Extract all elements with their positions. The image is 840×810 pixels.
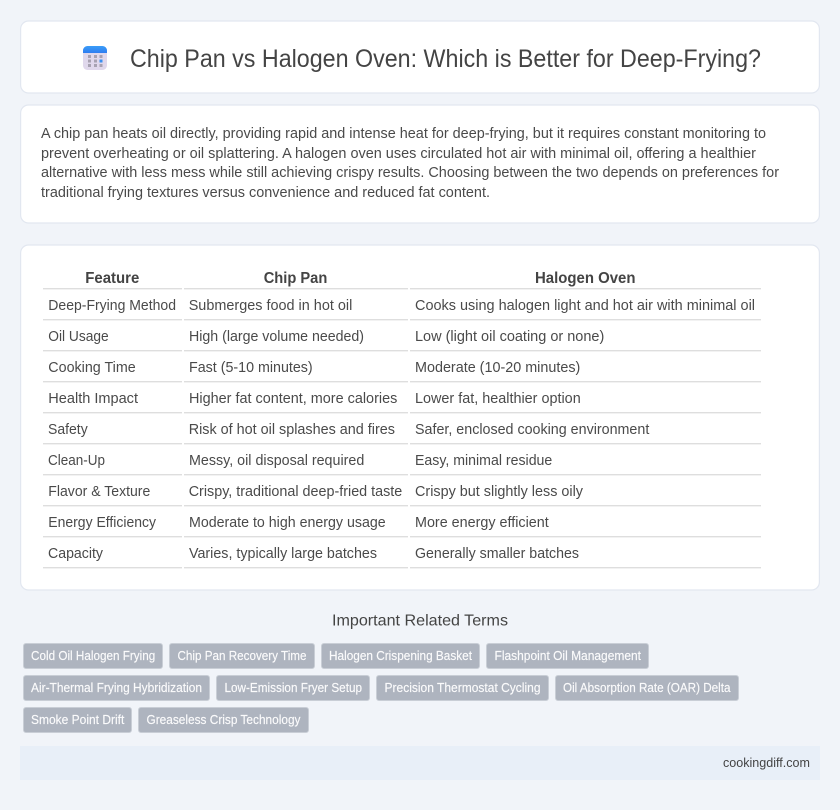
- table row: Energy Efficiency: [43, 515, 761, 537]
- tag: Chip Pan Recovery Time: [178, 649, 306, 663]
- table row: Flavor and Texture: Flavor & Texture: [48, 484, 150, 500]
- tag list: related terms: [24, 644, 738, 732]
- tag: Flashpoint Oil Management: [494, 649, 641, 663]
- heading: related terms: Important Related Terms: [332, 612, 508, 630]
- table header: [43, 270, 761, 289]
- tag: [376, 676, 548, 700]
- footer: [20, 746, 820, 780]
- table row: Cooking Time: Moderate (10-20 minutes): [415, 360, 580, 376]
- footer source: cookingdiff.com: [723, 756, 810, 770]
- tag: [216, 676, 370, 700]
- tag: Smoke Point Drift: [31, 713, 125, 727]
- tag: Cold Oil Halogen Frying: [31, 649, 155, 663]
- text block: description: traditional frying textures versus convenience and reduced fat content.: [41, 185, 490, 201]
- panel: header: [21, 21, 819, 93]
- tag: [24, 708, 132, 732]
- tag: Oil Absorption Rate (OAR) Delta: [563, 681, 730, 695]
- tag: Low-Emission Fryer Setup: [224, 681, 362, 695]
- table row: Health Impact: Higher fat content, more calories: [189, 391, 397, 407]
- text block: description: prevent overheating or oil splattering. A halogen oven uses circulated hot air with minimal oil, offering a healthier: [41, 146, 756, 162]
- tag: [24, 644, 162, 668]
- table header: Chip Pan: [264, 270, 327, 287]
- tag: [486, 644, 648, 668]
- table row: Capacity: [43, 546, 761, 568]
- title: Chip Pan vs Halogen Oven: Which is Better for Deep-Frying?: [130, 45, 761, 73]
- text block: description: A chip pan heats oil directly, providing rapid and intense heat for deep-frying, but it requires constant monitoring to: [41, 126, 766, 142]
- tag: Precision Thermostat Cycling: [384, 681, 540, 695]
- table row: Oil Usage: [43, 329, 761, 351]
- table row: Capacity: Capacity: [48, 546, 104, 562]
- tag: [170, 644, 314, 668]
- table row: Safety: Safer, enclosed cooking environment: [415, 422, 649, 438]
- tag: Air-Thermal Frying Hybridization: [31, 681, 202, 695]
- text block: description: alternative with less mess while still achieving crispy results. Choosing between the two depends on preferences for: [41, 165, 779, 181]
- table row: Capacity: Varies, typically large batches: [189, 546, 377, 562]
- table row: Clean-Up: Easy, minimal residue: [415, 453, 552, 469]
- table row: Deep-Frying Method: Cooks using halogen light and hot air with minimal oil: [415, 298, 755, 314]
- table row: Oil Usage: High (large volume needed): [189, 329, 364, 345]
- table row: Cooking Time: [43, 360, 761, 382]
- table header: Feature: [85, 270, 139, 287]
- table row: Energy Efficiency: More energy efficient: [415, 515, 549, 531]
- text block: description: [41, 126, 779, 201]
- table row: Safety: Risk of hot oil splashes and fires: [189, 422, 395, 438]
- tag: Greaseless Crisp Technology: [146, 713, 301, 727]
- tag: Halogen Crispening Basket: [329, 649, 472, 663]
- table row: Safety: [43, 422, 761, 444]
- table row: Deep-Frying Method: Deep-Frying Method: [48, 298, 176, 314]
- table row: Deep-Frying Method: [43, 298, 761, 320]
- table row: Health Impact: [43, 391, 761, 413]
- table row: Oil Usage: Low (light oil coating or none): [415, 329, 604, 345]
- table row: Safety: Safety: [48, 422, 88, 438]
- tag: [556, 676, 738, 700]
- table row: Clean-Up: [43, 453, 761, 475]
- panel: comparison table: [21, 245, 819, 590]
- tag: [138, 708, 308, 732]
- table row: Flavor and Texture: Crispy, traditional deep-fried taste: [189, 484, 402, 500]
- table header: Halogen Oven: [535, 270, 636, 287]
- table row: Energy Efficiency: Energy Efficiency: [48, 515, 157, 531]
- table row: Flavor and Texture: Crispy but slightly less oily: [415, 484, 584, 500]
- table row: Health Impact: Health Impact: [48, 391, 138, 407]
- table row: Clean-Up: Clean-Up: [48, 453, 105, 469]
- table row: Clean-Up: Messy, oil disposal required: [189, 453, 364, 469]
- panel: description: [21, 105, 819, 223]
- table row: Capacity: Generally smaller batches: [415, 546, 579, 562]
- table row: Cooking Time: Cooking Time: [48, 360, 136, 376]
- table row: Deep-Frying Method: Submerges food in hot oil: [189, 298, 352, 314]
- tag: [322, 644, 480, 668]
- table row: Flavor and Texture: [43, 484, 761, 506]
- tag: [24, 676, 210, 700]
- table row: Energy Efficiency: Moderate to high energy usage: [189, 515, 386, 531]
- table row: Oil Usage: Oil Usage: [48, 329, 109, 345]
- table row: Cooking Time: Fast (5-10 minutes): [189, 360, 313, 376]
- table row: Health Impact: Lower fat, healthier option: [415, 391, 581, 407]
- icon: calendar: [83, 46, 107, 70]
